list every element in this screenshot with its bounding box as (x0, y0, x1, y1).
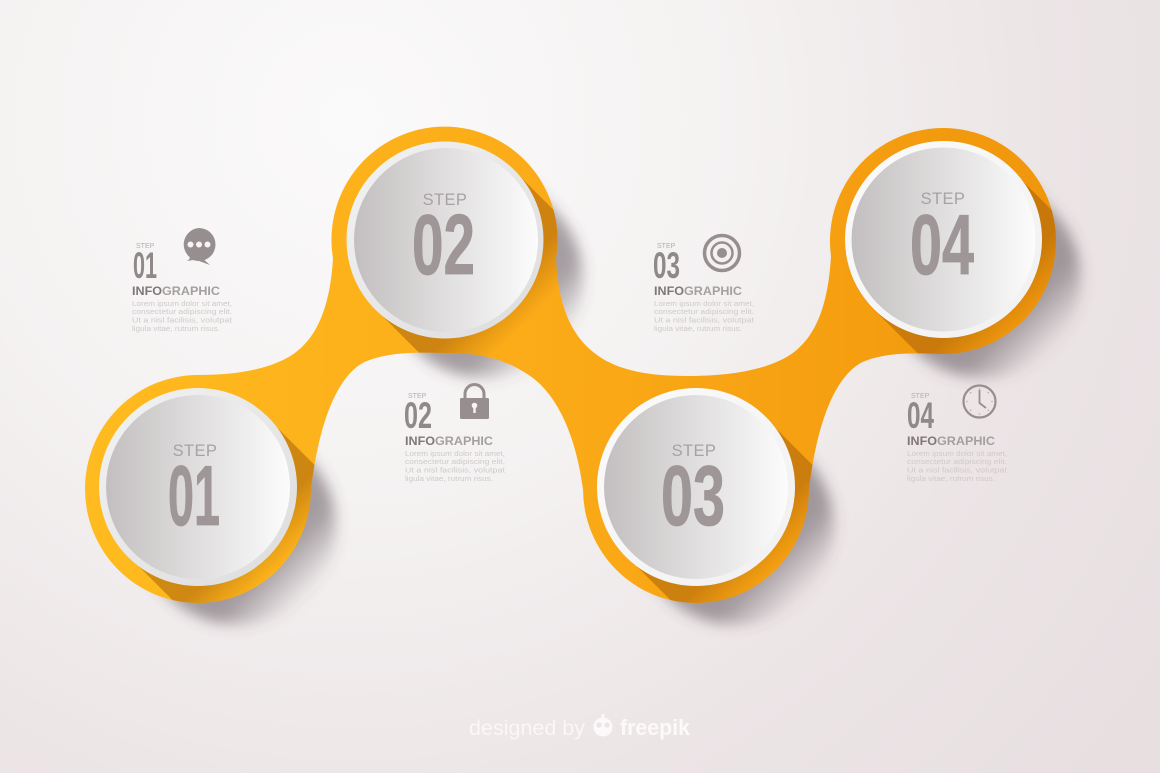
icon: speech bubble (184, 228, 216, 265)
text block: step 02: ligula vitae, rutrum risus. (405, 474, 493, 483)
footer credit: designed by (469, 717, 586, 740)
step 02 circle: STEP (423, 191, 467, 209)
text block: step 04: 04 (907, 395, 934, 436)
text block: step 01 (132, 243, 233, 333)
step 01 circle: STEP (173, 442, 217, 460)
step 04 circle: STEP (921, 190, 965, 208)
text block: step 03 (653, 243, 755, 333)
text block: step 02: 02 (404, 395, 432, 436)
icon: padlock (460, 385, 489, 419)
text block: step 04: STEP (911, 393, 930, 400)
step 04 circle: 04 (910, 198, 974, 293)
text block: step 03: Ut a nisl facilisis, volutpat (654, 316, 755, 324)
text block: step 03: ligula vitae, rutrum risus. (654, 324, 742, 333)
text block: step 02: Ut a nisl facilisis, volutpat (405, 466, 506, 474)
text block: step 02: STEP (408, 393, 427, 400)
icon: target (704, 236, 740, 270)
step 02 circle (346, 142, 544, 338)
text block: step 02: INFOGRAPHIC (405, 436, 493, 448)
text block: step 03: 03 (653, 245, 680, 286)
text block: step 01: 01 (133, 245, 157, 286)
text block: step 01: STEP (136, 243, 155, 250)
text block: step 02: Lorem ipsum dolor sit amet, (405, 449, 505, 458)
text block: step 04: consectetur adipiscing elit. (907, 457, 1007, 466)
text block: step 01: ligula vitae, rutrum risus. (132, 324, 220, 333)
text block: step 01: INFOGRAPHIC (132, 286, 220, 298)
step 03 circle: STEP (672, 442, 716, 460)
step 03 circle (597, 388, 795, 586)
text block: step 04: INFOGRAPHIC (907, 436, 995, 448)
text block: step 04 (907, 393, 1008, 483)
step 03 circle: 03 (661, 449, 725, 544)
shadows cast on the band (198, 240, 1003, 547)
step 04 circle (845, 141, 1042, 338)
footer credit (469, 714, 691, 740)
text block: step 04: Ut a nisl facilisis, volutpat (907, 466, 1008, 474)
text block: step 03: consectetur adipiscing elit. (654, 307, 754, 316)
footer credit: freepik (620, 715, 691, 740)
text block: step 04: ligula vitae, rutrum risus. (907, 474, 995, 483)
icon: clock (964, 386, 996, 418)
text block: step 01: Ut a nisl facilisis, volutpat (132, 316, 233, 324)
text block: step 01: consectetur adipiscing elit. (132, 307, 232, 316)
step 02 circle: 02 (412, 198, 475, 293)
yellow connected timeline band (85, 127, 1056, 603)
text block: step 02: consectetur adipiscing elit. (405, 457, 505, 466)
step 01 circle (99, 388, 297, 586)
step 01 circle: 01 (168, 449, 220, 544)
long shadows on background (198, 240, 983, 527)
text block: step 04: Lorem ipsum dolor sit amet, (907, 449, 1007, 458)
text block: step 03: INFOGRAPHIC (654, 286, 742, 298)
text block: step 02 (404, 393, 506, 483)
text block: step 03: Lorem ipsum dolor sit amet, (654, 299, 754, 308)
text block: step 01: Lorem ipsum dolor sit amet, (132, 299, 232, 308)
text block: step 03: STEP (657, 243, 676, 250)
